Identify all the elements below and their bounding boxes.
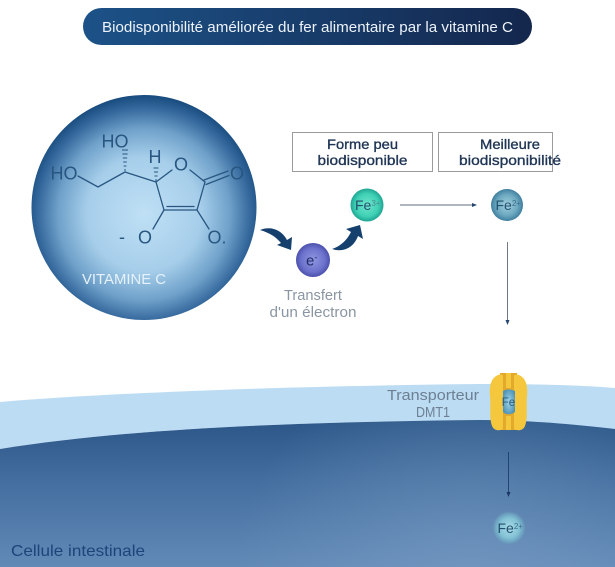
icon: DMT1 transporter: Fe: [502, 397, 515, 409]
molecule labels: [50, 132, 244, 248]
electron: -: [314, 252, 317, 262]
molecule labels: O.: [207, 228, 227, 248]
box: low bioavailability: biodisponible: [318, 152, 408, 168]
molecule structure: [78, 170, 229, 229]
caption: DMT1 transporter: [387, 387, 479, 421]
caption: electron transfer: Transfert: [284, 288, 342, 304]
caption: electron transfer: [270, 288, 356, 321]
title: [83, 8, 532, 45]
electron: [296, 243, 330, 277]
label: intestinal cell: Cellule intestinale: [11, 543, 145, 560]
arrow: sphere to electron: [260, 228, 292, 250]
molecule labels: O: [174, 154, 188, 174]
molecule labels: HO: [50, 164, 78, 184]
molecule labels: O: [138, 228, 152, 248]
arrow: transporter to cell interior: [506, 452, 510, 497]
vitamin C sphere: [32, 95, 256, 320]
box: better bioavailability: biodisponibilité: [459, 152, 561, 168]
box: low bioavailability: Forme peu: [327, 136, 398, 152]
arrow: electron to Fe3+: [332, 225, 363, 250]
box: better bioavailability: Meilleure: [480, 136, 540, 152]
Fe2+ ion: 2+: [512, 199, 521, 208]
molecule labels: HO: [102, 132, 128, 152]
electron: e: [306, 252, 314, 270]
panel: cell membrane: [0, 384, 615, 449]
sphere label: VITAMINE C: [82, 271, 166, 288]
arrow: Fe3+ to Fe2+: [400, 203, 477, 207]
caption: DMT1 transporter: Transporteur: [387, 387, 479, 404]
icon: DMT1 transporter: [490, 373, 527, 430]
Fe3+ ion: Fe: [355, 197, 371, 213]
Fe3+ ion: [350, 188, 384, 222]
molecule labels: O: [230, 164, 244, 184]
arrow: Fe2+ to transporter: [506, 242, 510, 325]
Fe2+ ion: [491, 189, 523, 221]
Fe2+ ion: Fe: [496, 197, 512, 213]
box: better bioavailability: [438, 132, 561, 172]
Fe2+ ion in cell: 2+: [514, 522, 523, 531]
molecule labels: H: [148, 147, 162, 167]
hashed wedges: [122, 150, 158, 180]
molecule labels: -: [119, 227, 125, 247]
Fe2+ ion in cell: [492, 511, 526, 545]
title: Biodisponibilité améliorée du fer alimentaire par la vitamine C: [102, 20, 513, 36]
caption: electron transfer: d'un électron: [270, 305, 356, 321]
box: low bioavailability: [292, 132, 432, 172]
Fe2+ ion in cell: Fe: [498, 520, 514, 536]
caption: DMT1 transporter: DMT1: [416, 404, 450, 421]
Fe3+ ion: 3+: [371, 199, 381, 208]
panel: intestinal cell: [0, 420, 615, 567]
